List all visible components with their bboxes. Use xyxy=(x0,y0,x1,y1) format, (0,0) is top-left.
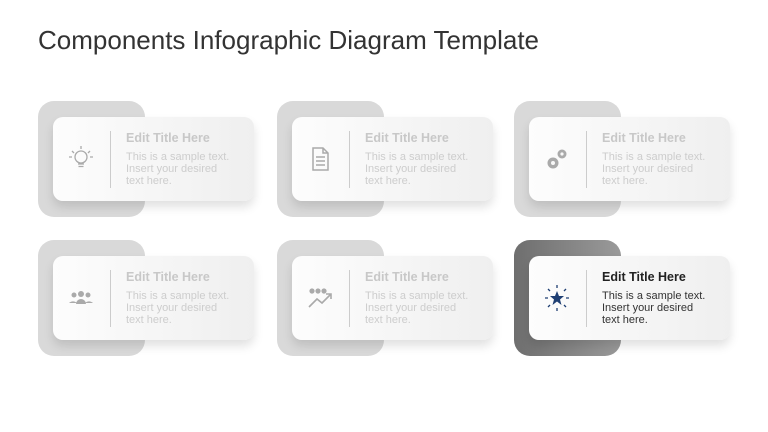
component 3: gears xyxy=(514,101,733,217)
component 5: growth xyxy=(277,240,496,356)
component 6: highlighted star: Edit Title Here xyxy=(602,270,686,284)
component 3: gears: text here. xyxy=(602,175,648,187)
icon: star burst xyxy=(545,285,569,311)
component 1: idea xyxy=(38,101,257,217)
component 5: growth: Edit Title Here xyxy=(365,270,449,284)
component 4: team: Edit Title Here xyxy=(126,270,210,284)
icon: document xyxy=(312,147,329,171)
component 2: document: Insert your desired xyxy=(365,163,456,175)
component 4: team xyxy=(38,240,257,356)
component 2: document: text here. xyxy=(365,175,411,187)
component 1: idea: This is a sample text. xyxy=(126,151,229,163)
component 3: gears: Edit Title Here xyxy=(602,131,686,145)
title: Components Infographic Diagram Template xyxy=(38,25,539,55)
component 6: highlighted star: Insert your desired xyxy=(602,302,693,314)
component 4: team: Insert your desired xyxy=(126,302,217,314)
component 5: growth: This is a sample text. xyxy=(365,290,468,302)
component 4: team: text here. xyxy=(126,314,172,326)
icon: people xyxy=(69,291,93,304)
icon: growth people xyxy=(308,288,332,308)
component 5: growth: text here. xyxy=(365,314,411,326)
component 3: gears: This is a sample text. xyxy=(602,151,705,163)
component 4: team: This is a sample text. xyxy=(126,290,229,302)
component 6: highlighted star xyxy=(514,240,733,356)
component 2: document xyxy=(277,101,496,217)
component 2: document: Edit Title Here xyxy=(365,131,449,145)
component 6: highlighted star: text here. xyxy=(602,314,648,326)
icon: lightbulb xyxy=(69,146,93,168)
component 1: idea: Insert your desired xyxy=(126,163,217,175)
component 6: highlighted star: This is a sample text. xyxy=(602,290,705,302)
component 5: growth: Insert your desired xyxy=(365,302,456,314)
icon: gears xyxy=(548,150,566,168)
component 1: idea: text here. xyxy=(126,175,172,187)
component 2: document: This is a sample text. xyxy=(365,151,468,163)
component 3: gears: Insert your desired xyxy=(602,163,693,175)
component 1: idea: Edit Title Here xyxy=(126,131,210,145)
